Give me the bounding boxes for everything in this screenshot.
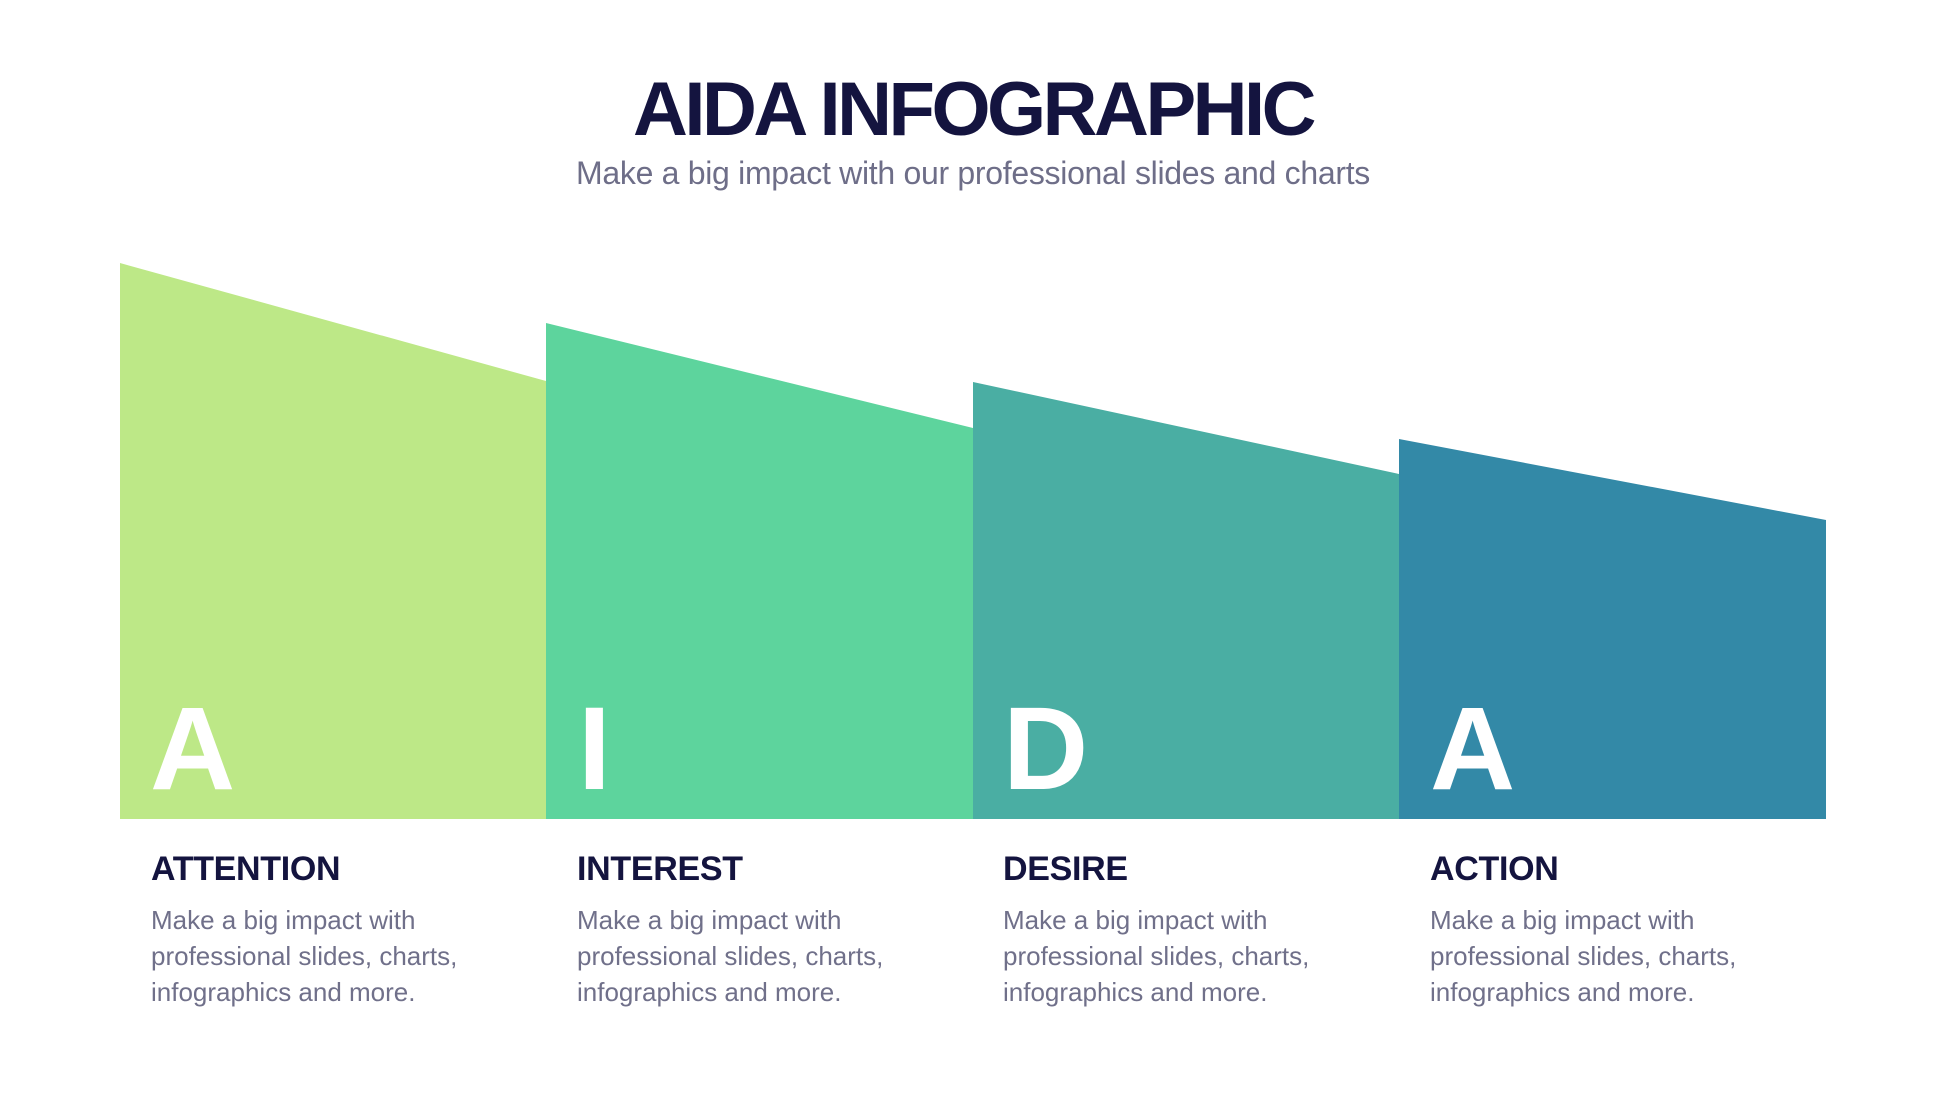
column: interest: Make a big impact with: [577, 905, 841, 935]
column: desire: professional slides, charts,: [1003, 941, 1309, 971]
column: action: [1430, 850, 1736, 1007]
shape: attention: A: [150, 683, 235, 815]
shape: attention: [120, 263, 546, 819]
shape: interest: I: [578, 683, 611, 815]
column: action: infographics and more.: [1430, 977, 1694, 1007]
column: action: ACTION: [1430, 850, 1559, 888]
column: action: Make a big impact with: [1430, 905, 1694, 935]
column: attention: infographics and more.: [151, 977, 415, 1007]
column: desire: infographics and more.: [1003, 977, 1267, 1007]
column: desire: [1003, 850, 1309, 1007]
shape: interest: [546, 323, 973, 819]
column: desire: DESIRE: [1003, 850, 1128, 888]
shape: action: [1399, 439, 1826, 819]
column: attention: ATTENTION: [151, 850, 340, 888]
column: interest: infographics and more.: [577, 977, 841, 1007]
column: desire: Make a big impact with: [1003, 905, 1267, 935]
column: interest: [577, 850, 883, 1007]
title: AIDA INFOGRAPHIC: [633, 67, 1313, 152]
column: attention: [151, 850, 457, 1007]
shape: action: A: [1430, 683, 1515, 815]
subtitle: Make a big impact with our professional slides and charts: [576, 155, 1370, 191]
column: attention: professional slides, charts,: [151, 941, 457, 971]
shape: desire: D: [1003, 683, 1088, 815]
column: interest: INTEREST: [577, 850, 743, 888]
shape: desire: [973, 382, 1399, 819]
column: interest: professional slides, charts,: [577, 941, 883, 971]
column: action: professional slides, charts,: [1430, 941, 1736, 971]
column: attention: Make a big impact with: [151, 905, 415, 935]
